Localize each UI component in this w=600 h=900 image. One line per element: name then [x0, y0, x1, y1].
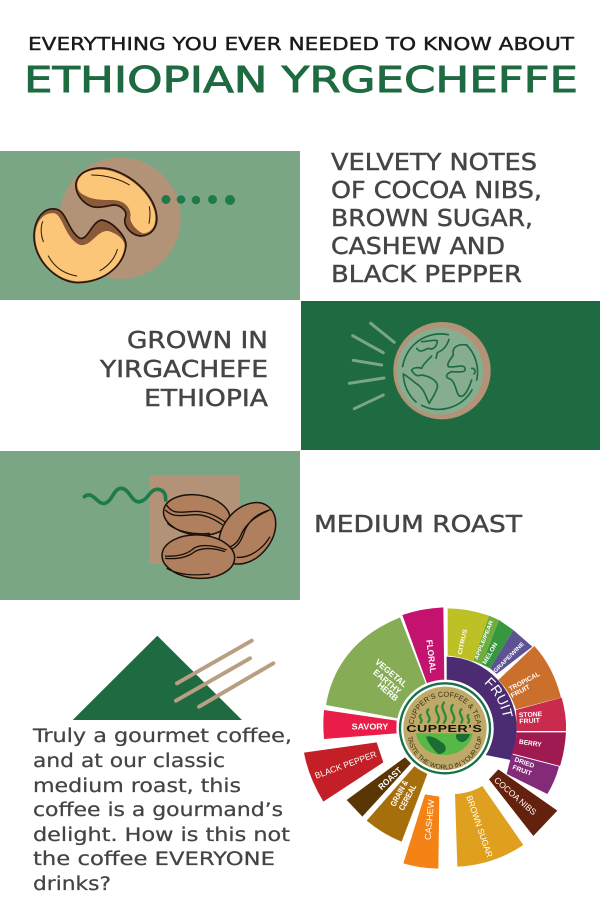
logo: Cupper's Coffee & Tea: CUPPER’S	[406, 724, 482, 735]
segment: vegetal earthy herb: EARTHY	[371, 667, 403, 696]
text: flavor notes: CASHEW AND	[331, 234, 505, 260]
segment: stone fruit: STONE	[519, 711, 543, 719]
title: ETHIOPIAN YRGECHEFFE	[24, 60, 578, 101]
segment: floral: FLORAL	[424, 639, 438, 674]
segment: grape and wine: GRAPE/WINE	[493, 641, 526, 674]
segment: tropical fruit: TROPICAL	[508, 671, 541, 693]
icon: radiating lines	[349, 323, 394, 409]
text: flavor notes: BROWN SUGAR,	[331, 206, 533, 232]
text: flavor notes: OF COCOA NIBS,	[331, 178, 542, 204]
chart: coffee flavor wheel	[304, 607, 566, 869]
logo: Cupper's Coffee & Tea: CUPPER’S COFFEE & TEA	[408, 692, 482, 724]
segment: melon: MELON	[482, 642, 499, 666]
segment: cashew	[403, 794, 439, 869]
icon: coffee beans	[84, 475, 287, 580]
text: paragraph	[32, 726, 292, 895]
text: flavor notes: VELVETY NOTES	[331, 150, 537, 176]
icon: dotted line	[162, 195, 235, 205]
segment: dried fruit: FRUIT	[511, 764, 532, 778]
segment: brown sugar	[455, 786, 523, 867]
segment: vegetal earthy herb	[326, 617, 426, 718]
segment: stone fruit: FRUIT	[519, 717, 540, 726]
segment: dried fruit	[507, 754, 559, 794]
segment: vegetal earthy herb: VEGETAL	[373, 657, 410, 690]
segment: grain and cereal	[367, 766, 427, 842]
text: paragraph: Truly a gourmet coffee,	[32, 726, 292, 747]
segment: stone fruit	[516, 698, 566, 731]
text: paragraph: delight. How is this not	[33, 825, 290, 846]
panel: roast	[0, 451, 300, 600]
segment: berry: BERRY	[518, 739, 542, 749]
segment: fruit	[446, 656, 517, 760]
segment: savory	[323, 710, 397, 739]
segment: black pepper	[304, 742, 383, 802]
text: paragraph: and at our classic	[33, 751, 225, 772]
segment: melon	[482, 620, 513, 668]
segment: savory: SAVORY	[352, 721, 389, 731]
logo: Cupper's Coffee & Tea	[396, 680, 494, 774]
segment: grain and cereal: CEREAL	[396, 782, 418, 812]
text: roast: MEDIUM ROAST	[314, 512, 523, 538]
segment: berry	[512, 732, 566, 766]
icon: cashews	[34, 158, 181, 283]
segment: vegetal earthy herb: HERB	[376, 680, 400, 703]
text: flavor notes	[331, 150, 542, 288]
segment: citrus: CITRUS	[458, 629, 469, 655]
segment: cocoa nibs: COCOA NIBS	[492, 775, 539, 817]
title: EVERYTHING YOU EVER NEEDED TO KNOW ABOUT	[28, 35, 574, 55]
icon: globe	[393, 322, 491, 419]
segment: black pepper: BLACK PEPPER	[313, 749, 378, 781]
text: origin: ETHIOPIA	[144, 386, 268, 412]
text: paragraph: coffee is a gourmand’s	[33, 800, 283, 821]
title	[24, 35, 578, 101]
segment: cocoa nibs	[489, 769, 557, 836]
segment: dried fruit: DRIED	[513, 756, 535, 770]
text: paragraph: the coffee EVERYONE	[33, 849, 275, 870]
icon: triangle with lines	[73, 636, 273, 720]
segment: apple and pear: APPLE/PEAR	[474, 620, 495, 661]
segment: roast: ROAST	[376, 765, 404, 792]
segment: cashew: CASHEW	[423, 798, 436, 840]
segment: grape and wine	[490, 630, 532, 674]
segment: tropical fruit	[498, 646, 561, 709]
segment: tropical fruit: FRUIT	[510, 684, 531, 700]
segment: citrus	[448, 608, 489, 662]
segment: fruit: FRUIT	[484, 677, 513, 716]
segment: apple and pear	[473, 616, 499, 664]
segment: roast	[347, 757, 411, 817]
panel: flavor notes	[0, 151, 300, 300]
segment: grain and cereal: GRAIN &	[388, 778, 410, 808]
segment: floral	[402, 607, 444, 683]
text: paragraph: medium roast, this	[33, 776, 241, 797]
text: paragraph: drinks?	[33, 874, 111, 895]
panel: origin	[301, 301, 600, 450]
text: origin	[99, 328, 268, 412]
text: flavor notes: BLACK PEPPER	[331, 262, 522, 288]
text: origin: YIRGACHEFE	[99, 357, 268, 383]
text: origin: GROWN IN	[127, 328, 268, 354]
logo: Cupper's Coffee & Tea: TASTE THE WORLD IN YOUR CUP	[408, 736, 482, 770]
segment: brown sugar: BROWN SUGAR	[464, 794, 495, 859]
